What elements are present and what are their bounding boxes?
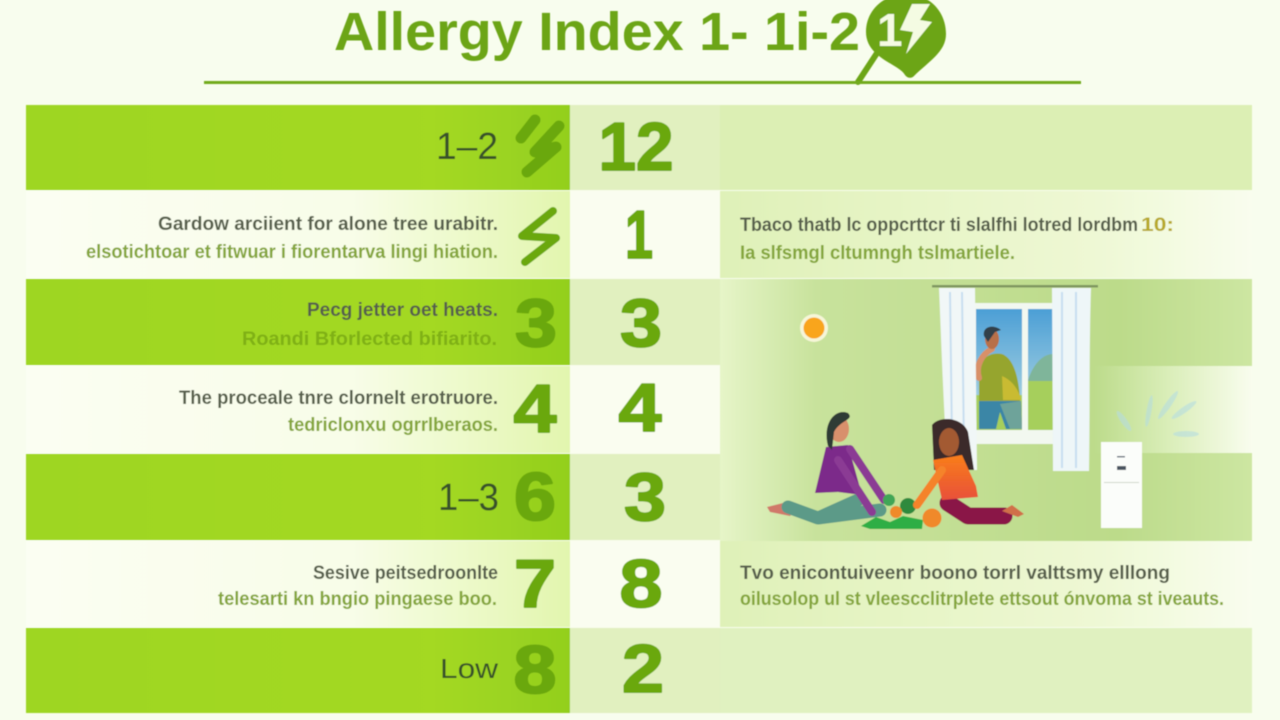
row 3 text — [242, 300, 498, 350]
panel: middle column bands — [570, 105, 720, 713]
illustration: family at home — [720, 279, 1252, 541]
icon: sun — [800, 314, 828, 342]
row 5 number: 3 — [624, 459, 666, 535]
row 7 number: 2 — [622, 631, 664, 707]
icon: row 1 bolt — [521, 120, 559, 172]
right text block: upper: Ia slfsmgl cltumngh tslmartiele. — [740, 243, 1015, 264]
row 4 text: The proceale tnre clornelt erotruore. — [179, 388, 498, 409]
row 4 text — [179, 388, 498, 436]
icon: row 2 bolt — [522, 211, 556, 262]
right text block: upper — [740, 215, 1174, 264]
man at the window — [978, 327, 1022, 429]
pollen leaves — [1115, 389, 1199, 437]
row 3 icon digit: 3 — [515, 285, 557, 361]
air purifier — [1101, 442, 1142, 528]
row 2 text: Gardow arciient for alone tree urabitr. — [158, 214, 498, 235]
right text block: lower — [740, 563, 1224, 610]
title: Allergy Index 1- 1i-2 — [334, 2, 860, 62]
right text block: lower: Tvo enicontuiveenr boono torrl valttsmy elllong — [740, 563, 1170, 584]
curtains and rod — [932, 285, 1098, 471]
row 3 text: Roandi Bforlected bifiarito. — [242, 329, 497, 350]
row 1 label: 1–2 — [436, 126, 498, 168]
row 6 text — [218, 563, 498, 610]
row 7 label: Low — [440, 653, 499, 684]
row 4 number: 4 — [618, 370, 662, 446]
panel: right column bands — [720, 105, 1252, 713]
woman left, purple top — [767, 412, 884, 518]
row 2 number: 1 — [625, 197, 653, 273]
row 2 text: elsotichtoar et fitwuar i fiorentarva lingi hiation. — [86, 242, 498, 263]
right text block: upper: 10: — [1141, 215, 1174, 236]
woman right, orange top — [917, 419, 1024, 517]
row 4 text: tedriclonxu ogrrlberaos. — [288, 415, 498, 436]
icon: magnifier pin badge: 1 — [877, 4, 903, 56]
row 4 icon digit: 4 — [514, 371, 557, 447]
row 6 text: telesarti kn bngio pingaese boo. — [218, 589, 497, 610]
row 7 icon digit: 8 — [514, 632, 556, 708]
row 6 text: Sesive peitsedroonlte — [313, 563, 498, 584]
right text block: lower: oilusolop ul st vleescclitrplete ettsout ónvoma st iveauts. — [740, 589, 1224, 610]
row 6 number: 8 — [620, 546, 662, 622]
row 2 text — [86, 214, 498, 263]
illustration wall — [720, 279, 1252, 541]
panel: left column bands — [26, 105, 570, 713]
row 1 number: 12 — [598, 109, 674, 185]
row 3 number: 3 — [620, 285, 662, 361]
title underline — [204, 81, 1081, 84]
window — [975, 303, 1053, 444]
row 5 icon digit: 6 — [514, 459, 556, 535]
produce on the floor — [861, 494, 942, 529]
row 5 label: 1–3 — [438, 477, 499, 519]
right text block: upper: Tbaco thatb lc oppcrttcr ti slalfhi lotred lordbm — [740, 215, 1138, 236]
row 6 icon digit: 7 — [514, 546, 556, 622]
icon: magnifier pin badge — [858, 0, 946, 82]
row 3 text: Pecg jetter oet heats. — [307, 300, 498, 321]
